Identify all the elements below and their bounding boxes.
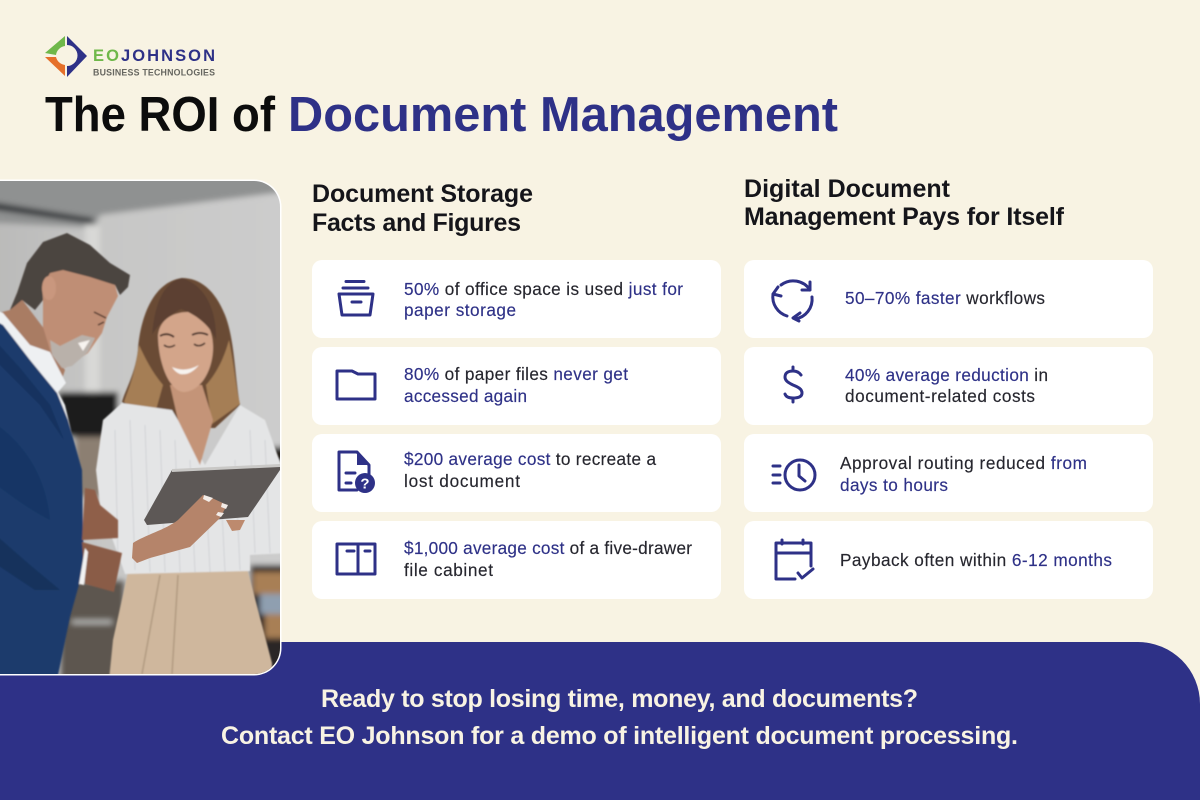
card: office space [312, 260, 721, 338]
man's beard [50, 335, 95, 368]
stat text [840, 453, 1087, 495]
stat text: $1,000 average cost of a five-drawer [404, 538, 692, 558]
man's jacket [0, 318, 85, 690]
section heading: digital document management [744, 175, 1065, 231]
man's hair [10, 233, 130, 310]
card: cost reduction [744, 347, 1153, 425]
call to action line 2: Contact EO Johnson for a demo of intelligent document processing. [221, 722, 1018, 750]
stat text: 50–70% faster workflows [845, 288, 1045, 308]
stat text: 40% average reduction in [845, 365, 1048, 385]
office background [0, 181, 280, 674]
woman trousers [108, 570, 273, 674]
section heading: digital document management: Management Pays for Itself [744, 203, 1065, 231]
stat text: Approval routing reduced from [840, 453, 1087, 473]
man's shirt collar [0, 311, 74, 436]
card: faster workflows [744, 260, 1153, 338]
skin below tablet [226, 520, 245, 531]
section heading: document storage: Document Storage [312, 180, 533, 208]
stat text [404, 538, 692, 580]
man [0, 233, 130, 690]
section heading: document storage: Facts and Figures [312, 209, 521, 237]
stat text: paper storage [404, 300, 516, 320]
stat text: file cabinet [404, 560, 493, 580]
logo mark [45, 36, 87, 77]
stat text: document-related costs [845, 386, 1035, 406]
logo wordmark: EOJOHNSON [93, 47, 215, 65]
card: payback [744, 521, 1153, 599]
stat text: $200 average cost to recreate a [404, 449, 656, 469]
man's head [42, 268, 118, 368]
title: The ROI of [45, 88, 276, 142]
icon: document with question mark [339, 452, 375, 493]
woman blouse [96, 403, 290, 574]
icon: folder [337, 371, 375, 399]
tablet [144, 465, 280, 525]
card: lost document [312, 434, 721, 512]
icon: refresh cycle [773, 281, 812, 321]
man's neck [2, 300, 66, 376]
icon: calendar with check [776, 540, 813, 579]
title [45, 88, 838, 142]
card: file cabinet [312, 521, 721, 599]
icon: dollar sign [785, 367, 802, 402]
footer banner [0, 642, 1200, 800]
card: approval routing [744, 434, 1153, 512]
woman neck and chest [170, 385, 213, 465]
man's ear [42, 276, 56, 300]
section heading: digital document management: Digital Document [744, 175, 951, 203]
photo: two colleagues reviewing a tablet [0, 180, 282, 676]
stat text: Payback often within 6-12 months [840, 550, 1112, 570]
icon: document with question mark: ? [360, 476, 370, 492]
icon: fast clock [773, 460, 815, 490]
stat text [404, 364, 628, 406]
call to action line 1: Ready to stop losing time, money, and documents? [321, 685, 918, 713]
woman hair [122, 278, 240, 428]
stat text: 80% of paper files never get [404, 364, 628, 384]
section heading: document storage [312, 180, 533, 237]
icon: file cabinet [337, 544, 375, 574]
stat text: accessed again [404, 386, 527, 406]
stat text: 50% of office space is used just for [404, 279, 683, 299]
stat text [845, 365, 1048, 406]
stat text [404, 279, 683, 320]
stat text: days to hours [840, 475, 948, 495]
icon: archive box [339, 282, 373, 315]
woman face [158, 312, 213, 392]
woman's hand and forearm [132, 495, 227, 563]
woman [96, 278, 290, 690]
logo tagline: BUSINESS TECHNOLOGIES [93, 68, 215, 78]
title: Document Management [288, 88, 838, 142]
stat text [404, 449, 656, 491]
man's hands [82, 488, 118, 540]
card: paper files [312, 347, 721, 425]
logo [45, 36, 215, 78]
stat text: lost document [404, 471, 520, 491]
